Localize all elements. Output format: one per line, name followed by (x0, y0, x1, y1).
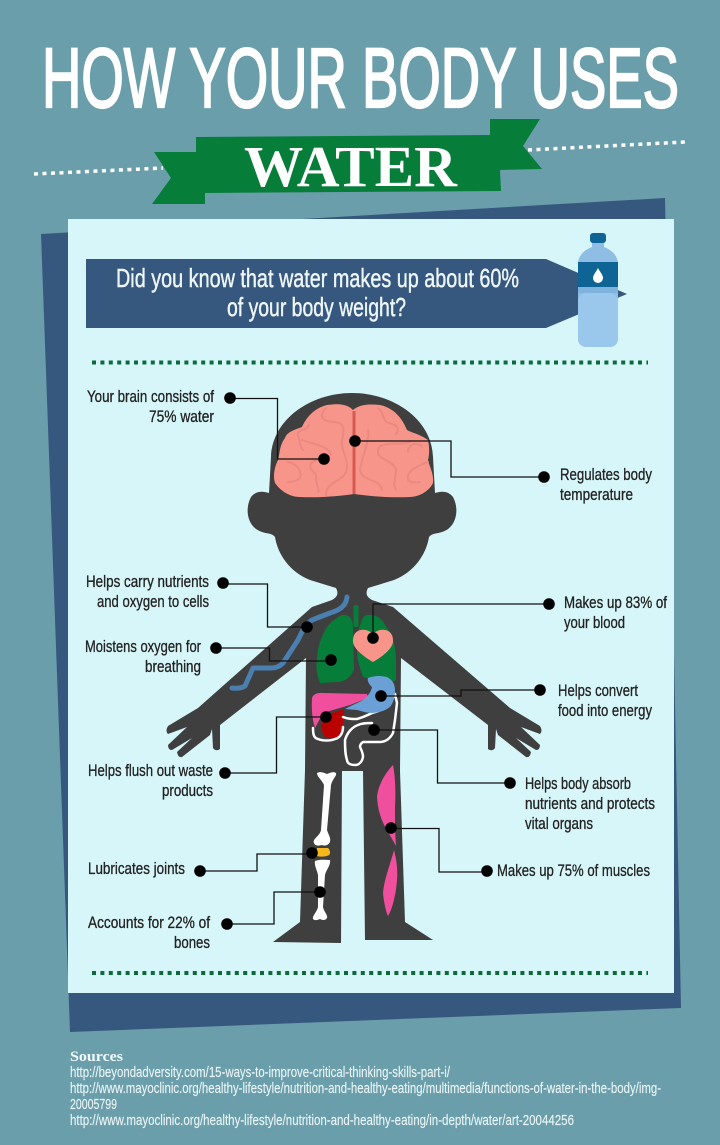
callout banner (86, 259, 627, 328)
label: bones (88, 914, 210, 952)
sources: http://www.mayoclinic.org/healthy-lifestyle/nutrition-and-healthy-eating/in-depth/water/art-20044256 (70, 1113, 574, 1129)
label: bones: Accounts for 22% of (88, 914, 210, 932)
label: temperature: temperature (560, 486, 633, 504)
label: joints: Lubricates joints (88, 860, 185, 878)
joint (317, 848, 330, 857)
back panel (41, 198, 681, 1032)
label: absorb: vital organs (525, 815, 593, 833)
label: absorb (525, 775, 655, 833)
label: breathing (85, 638, 201, 676)
main card (68, 219, 674, 993)
liver (312, 693, 368, 728)
dotted line left (34, 168, 163, 174)
callout banner: Did you know that water makes up about 60% (116, 263, 519, 293)
sources: 20005799 (70, 1097, 117, 1113)
kidney (321, 709, 344, 738)
label: absorb: nutrients and protects (525, 795, 655, 813)
sources: http://beyondadversity.com/15-ways-to-improve-critical-thinking-skills-part-i/ (70, 1065, 451, 1081)
label: nutrients: and oxygen to cells (97, 593, 209, 611)
ribbon banner: water: WATER (244, 134, 458, 199)
shin bone (313, 860, 330, 920)
label: blood: your blood (564, 614, 625, 632)
body silhouette (166, 393, 542, 943)
label: nutrients (86, 573, 209, 611)
dotted divider bottom (92, 971, 648, 975)
label: absorb: Helps body absorb (525, 775, 631, 793)
label: waste (88, 762, 213, 800)
label: breathing: breathing (145, 658, 201, 676)
icon: water bottle (578, 233, 618, 347)
label: brain water (87, 388, 214, 426)
thigh bone (314, 772, 336, 846)
label: blood (564, 594, 667, 632)
callout banner: of your body weight? (227, 292, 406, 322)
dotted divider top (92, 360, 648, 364)
vein (232, 597, 347, 688)
label: breathing: Moistens oxygen for (85, 638, 201, 656)
callout lines and dots (194, 392, 555, 930)
stomach (345, 676, 395, 713)
label: bones: bones (174, 934, 210, 952)
sources: Sources (70, 1049, 123, 1065)
sources (70, 1049, 661, 1129)
label: energy: Helps convert (558, 682, 638, 700)
label: brain water: Your brain consists of (87, 388, 214, 406)
label: nutrients: Helps carry nutrients (86, 573, 209, 591)
label: temperature (560, 466, 653, 504)
label: temperature: Regulates body (560, 466, 653, 484)
intestines (313, 694, 397, 765)
lungs (316, 605, 396, 684)
leg muscles (377, 765, 397, 916)
label: energy: food into energy (558, 702, 653, 720)
label: energy (558, 682, 653, 720)
brain (274, 404, 433, 497)
label: waste: Helps flush out waste (88, 762, 213, 780)
dotted line right (528, 142, 685, 150)
label: muscles: Makes up 75% of muscles (497, 862, 650, 880)
label: blood: Makes up 83% of (564, 594, 667, 612)
heart (353, 630, 393, 662)
label: waste: products (162, 782, 213, 800)
label: brain water: 75% water (149, 408, 214, 426)
ribbon banner: water (152, 119, 542, 204)
